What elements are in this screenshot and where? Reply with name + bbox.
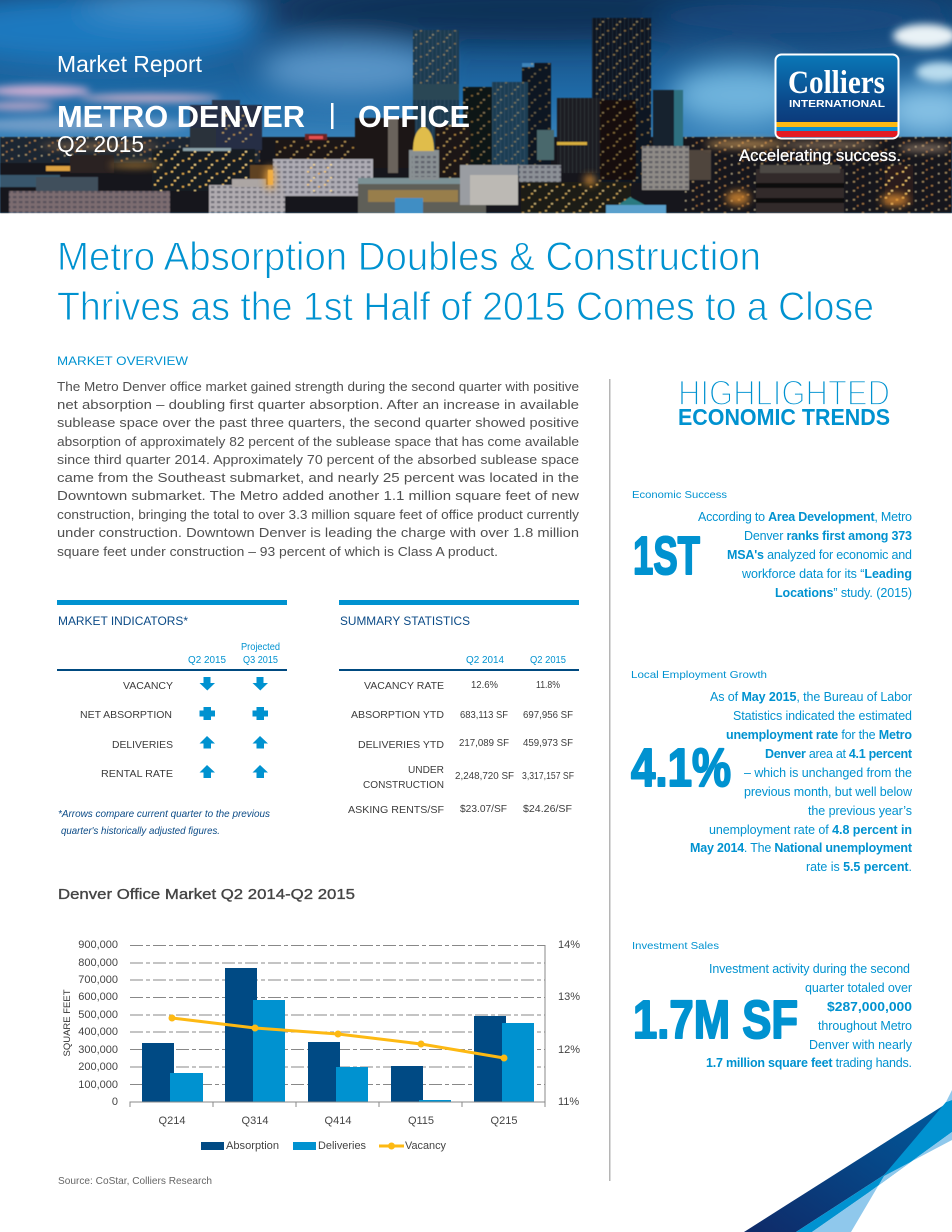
text block: local employment growth: May 2014. The National unemployment bbox=[690, 841, 913, 855]
panel: market indicators: DELIVERIES bbox=[112, 739, 173, 751]
text block: economic success: According to Area Development, Metro bbox=[698, 510, 912, 524]
source note: Source: CoStar, Colliers Research bbox=[58, 1175, 212, 1187]
panel: summary statistics: ABSORPTION YTD bbox=[351, 709, 444, 721]
category labels: Q115 bbox=[408, 1115, 434, 1127]
heading: highlighted economic trends: HIGHLIGHTED bbox=[678, 374, 890, 413]
footnote: *Arrows compare current quarter to the previous bbox=[58, 808, 271, 820]
right axis labels: 14% bbox=[558, 939, 580, 951]
text block: local employment growth: unemployment rate for the Metro bbox=[726, 728, 912, 742]
panel: economic success: Economic Success bbox=[632, 489, 727, 501]
panel: economic success bbox=[632, 489, 912, 600]
text block: local employment growth: unemployment rate of 4.8 percent in bbox=[709, 823, 912, 837]
logo tagline: Accelerating success. bbox=[739, 146, 901, 165]
city base bbox=[0, 137, 952, 213]
footnote bbox=[58, 808, 271, 837]
text block: economic success: Locations” study. (2015) bbox=[775, 586, 912, 600]
panel: summary statistics: VACANCY RATE bbox=[364, 680, 444, 692]
header text: quarter: Q2 2015 bbox=[57, 131, 144, 157]
left axis labels: 600,000 bbox=[78, 991, 118, 1003]
text block: investment sales: 1.7 million square feet trading hands. bbox=[706, 1056, 912, 1070]
panel: local employment growth: Local Employment Growth bbox=[631, 669, 767, 681]
right axis labels bbox=[558, 939, 580, 1108]
text block: economic success: MSA's analyzed for economic and bbox=[727, 548, 912, 562]
column divider bbox=[609, 379, 610, 1181]
text block: local employment growth: As of May 2015, the Bureau of Labor bbox=[710, 690, 912, 704]
lit white building bbox=[273, 159, 373, 196]
panel: market indicators: NET ABSORPTION bbox=[80, 709, 172, 721]
category labels: Q414 bbox=[325, 1115, 351, 1127]
left axis labels: 200,000 bbox=[78, 1061, 118, 1073]
text block: market overview: sublease space over the past three quarters, the second quarter showed positive bbox=[57, 415, 579, 430]
header text: metro denver office: OFFICE bbox=[358, 99, 470, 134]
combo chart: absorption, deliveries and vacancy bbox=[62, 939, 580, 1152]
text block: local employment growth: rate is 5.5 percent. bbox=[806, 860, 912, 874]
main title: Thrives as the 1st Half of 2015 Comes to a Close bbox=[57, 285, 874, 329]
absorption bars bbox=[142, 968, 506, 1102]
text block: investment sales: throughout Metro bbox=[818, 1019, 912, 1033]
left axis labels: 300,000 bbox=[78, 1044, 118, 1056]
text block: market overview: The Metro Denver office market gained strength during the second quarter with positive bbox=[57, 379, 579, 394]
big stat: 1st: 1ST bbox=[633, 526, 700, 586]
text block: economic success: workforce data for its “Leading bbox=[741, 567, 912, 581]
header text: metro denver office bbox=[57, 99, 470, 134]
left axis labels: 900,000 bbox=[78, 939, 118, 951]
header photo: Denver skyline bbox=[0, 0, 952, 213]
text block: local employment growth: Denver area at 4.1 percent bbox=[765, 747, 913, 761]
icon: deliveries up arrows bbox=[200, 736, 268, 748]
legend: Absorption bbox=[226, 1140, 279, 1152]
legend: Vacancy bbox=[405, 1140, 446, 1152]
panel: market indicators: Q3 2015 bbox=[243, 655, 278, 666]
legend: Deliveries bbox=[318, 1140, 366, 1152]
right axis labels: 12% bbox=[558, 1044, 580, 1056]
text block: investment sales: quarter totaled over bbox=[805, 981, 912, 995]
panel: market indicators: MARKET INDICATORS* bbox=[58, 614, 188, 628]
category labels: Q314 bbox=[242, 1115, 268, 1127]
footnote: quarter's historically adjusted figures. bbox=[61, 825, 220, 837]
icon: net absorption plus signs bbox=[200, 707, 268, 720]
chart title: Denver Office Market Q2 2014-Q2 2015 bbox=[58, 886, 355, 903]
text block: economic success: Denver ranks first among 373 bbox=[744, 529, 912, 543]
panel: investment sales: Investment Sales bbox=[632, 940, 719, 952]
right axis labels: 13% bbox=[558, 991, 580, 1003]
big stat: 1.7M SF: 1.7M SF bbox=[633, 990, 798, 1050]
logo: Colliers International: Colliers bbox=[788, 65, 885, 101]
text block: investment sales: Investment activity during the second bbox=[709, 962, 910, 976]
text block: market overview bbox=[57, 379, 580, 559]
panel: summary statistics: 12.6% bbox=[471, 679, 498, 691]
panel: summary statistics: 697,956 SF bbox=[523, 709, 573, 721]
text block: economic success bbox=[698, 510, 912, 600]
panel: summary statistics: Q2 2014 bbox=[466, 655, 504, 666]
vacancy line bbox=[168, 1014, 508, 1062]
text block: local employment growth: Statistics indicated the estimated bbox=[733, 709, 912, 723]
panel: summary statistics: 11.8% bbox=[536, 679, 560, 691]
panel: summary statistics: $23.07/SF bbox=[460, 803, 507, 815]
panel: summary statistics: $24.26/SF bbox=[523, 803, 572, 815]
axes bbox=[130, 946, 545, 1107]
category labels bbox=[159, 1115, 517, 1127]
category labels: Q215 bbox=[491, 1115, 517, 1127]
panel: summary statistics bbox=[339, 600, 579, 816]
text block: investment sales bbox=[706, 962, 913, 1070]
logo: Colliers International bbox=[776, 54, 898, 138]
corner ribbon graphic bbox=[744, 1090, 952, 1232]
text block: investment sales: $287,000,000 bbox=[827, 1000, 912, 1014]
heading: highlighted economic trends: ECONOMIC TRENDS bbox=[678, 404, 890, 430]
left axis labels: 0 bbox=[112, 1096, 118, 1108]
panel: summary statistics: 2,248,720 SF bbox=[455, 770, 514, 782]
left axis labels: 500,000 bbox=[78, 1009, 118, 1021]
panel: summary statistics: 459,973 SF bbox=[523, 737, 573, 749]
lower-left office block bbox=[152, 149, 255, 191]
text block: investment sales: Denver with nearly bbox=[809, 1038, 913, 1052]
left axis labels: 700,000 bbox=[78, 974, 118, 986]
panel: summary statistics: 683,113 SF bbox=[460, 709, 508, 721]
panel: summary statistics: UNDER bbox=[408, 764, 444, 776]
icon: rental rate up arrows bbox=[200, 765, 268, 778]
header text: market report: Market Report bbox=[57, 51, 203, 77]
text block: market overview: Downtown submarket. The Metro added another 1.1 million square feet of new bbox=[57, 488, 580, 503]
panel: summary statistics: SUMMARY STATISTICS bbox=[340, 614, 470, 628]
panel: summary statistics: 217,089 SF bbox=[459, 737, 509, 749]
text block: local employment growth bbox=[690, 690, 913, 874]
text block: market overview: net absorption – doubling first quarter absorption. After an increase in available bbox=[57, 397, 579, 412]
panel: summary statistics: Q2 2015 bbox=[530, 655, 566, 666]
panel: summary statistics: ASKING RENTS/SF bbox=[348, 804, 444, 816]
panel: market indicators: RENTAL RATE bbox=[101, 768, 173, 780]
panel: market indicators: Q2 2015 bbox=[188, 655, 226, 666]
main title: Metro Absorption Doubles & Construction bbox=[57, 235, 761, 279]
heading: market overview: MARKET OVERVIEW bbox=[57, 354, 189, 368]
left axis labels bbox=[78, 939, 118, 1108]
big stat: 4.1%: 4.1% bbox=[631, 738, 731, 798]
text block: local employment growth: – which is unchanged from the bbox=[744, 766, 912, 780]
panel: local employment growth bbox=[631, 669, 913, 874]
city light glows bbox=[705, 140, 785, 148]
left axis labels: 100,000 bbox=[78, 1079, 118, 1091]
capitol bbox=[358, 178, 486, 213]
legend bbox=[201, 1140, 446, 1152]
heading: highlighted economic trends bbox=[678, 374, 890, 430]
main title bbox=[57, 235, 874, 329]
text block: market overview: construction, bringing the total to over 3.3 million square feet of office product currently bbox=[57, 507, 580, 522]
text block: market overview: absorption of approximately 82 percent of the sublease space that has come available bbox=[57, 434, 579, 449]
logo: Colliers International: INTERNATIONAL bbox=[789, 98, 886, 110]
left axis labels: 800,000 bbox=[78, 957, 118, 969]
text block: local employment growth: the previous year’s bbox=[808, 804, 912, 818]
left axis labels: 400,000 bbox=[78, 1026, 118, 1038]
icon: vacancy down arrows bbox=[200, 677, 268, 690]
panel: market indicators: VACANCY bbox=[123, 680, 173, 692]
panel: summary statistics: DELIVERIES YTD bbox=[358, 739, 444, 751]
text block: market overview: under construction. Downtown Denver is leading the charge with over 1.8 million bbox=[57, 525, 579, 540]
right axis labels: 11% bbox=[558, 1096, 579, 1108]
panel: market indicators bbox=[57, 600, 287, 837]
towers bbox=[413, 30, 459, 160]
panel: market indicators: Projected bbox=[241, 642, 280, 653]
deliveries bars bbox=[170, 1000, 534, 1102]
centre/right low rise bbox=[460, 165, 518, 205]
category labels: Q214 bbox=[159, 1115, 185, 1127]
text block: local employment growth: previous month, but well below bbox=[744, 785, 913, 799]
panel: summary statistics: CONSTRUCTION bbox=[363, 779, 444, 791]
panel: investment sales bbox=[632, 940, 913, 1070]
text block: market overview: square feet under construction – 93 percent of which is Class A product. bbox=[57, 544, 498, 559]
text block: market overview: came from the Southeast submarket, and nearly 25 percent was located in the bbox=[57, 470, 579, 485]
text block: market overview: since third quarter 2014. Approximately 70 percent of the absorbed sublease space bbox=[57, 452, 579, 467]
panel: summary statistics: 3,317,157 SF bbox=[522, 770, 574, 782]
left axis title: SQUARE FEET bbox=[62, 989, 73, 1057]
header text: metro denver office: METRO DENVER bbox=[57, 99, 305, 134]
